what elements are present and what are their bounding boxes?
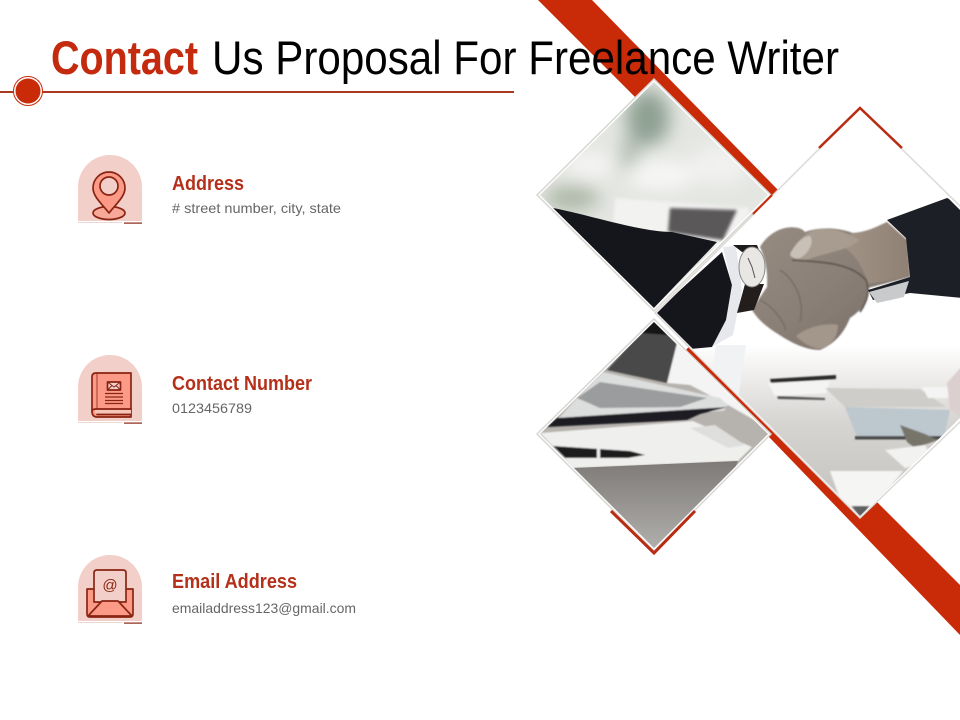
contact item: address xyxy=(78,155,341,224)
contact item: phone xyxy=(78,355,312,424)
laptop screen xyxy=(606,330,678,384)
heading: email address: Email Address xyxy=(172,571,297,593)
table xyxy=(703,358,960,516)
icon: open envelope: @ xyxy=(102,577,118,594)
left sleeve xyxy=(655,252,732,349)
heading: contact number: Contact Number xyxy=(172,373,312,395)
accent: right of top diamond xyxy=(753,195,772,214)
title xyxy=(51,31,839,84)
heading: address: Address xyxy=(172,173,244,195)
title accent word: Contact xyxy=(51,31,198,84)
shirt cuff xyxy=(712,246,742,347)
pen xyxy=(553,446,645,458)
right watch xyxy=(869,281,909,303)
accent: top of handshake diamond xyxy=(819,108,902,148)
detail: address: # street number, city, state xyxy=(172,200,341,216)
table objects xyxy=(768,366,960,517)
paper xyxy=(540,421,752,468)
diagonal band: lower xyxy=(686,343,960,635)
diagonal band: upper xyxy=(538,0,778,216)
contact item: email xyxy=(78,555,356,624)
icon: location pin xyxy=(78,155,142,224)
icon: contact book xyxy=(78,355,142,424)
photo diamond: laptop and papers xyxy=(535,318,775,553)
photo diamond: handshake xyxy=(650,105,960,520)
accent: bottom of laptop diamond xyxy=(611,511,695,553)
photo diamond: top xyxy=(530,75,775,315)
wristwatch xyxy=(733,245,765,313)
clasped hands xyxy=(752,222,910,350)
icon: open envelope xyxy=(78,555,142,624)
detail: email address: emailaddress123@gmail.com xyxy=(172,600,356,616)
right sleeve xyxy=(868,198,960,300)
detail: phone number: 0123456789 xyxy=(172,400,252,416)
laptop base xyxy=(557,372,728,420)
title rule with dot xyxy=(0,76,514,106)
title remainder: Us Proposal For Freelance Writer xyxy=(212,31,839,84)
table foreground xyxy=(573,461,738,552)
